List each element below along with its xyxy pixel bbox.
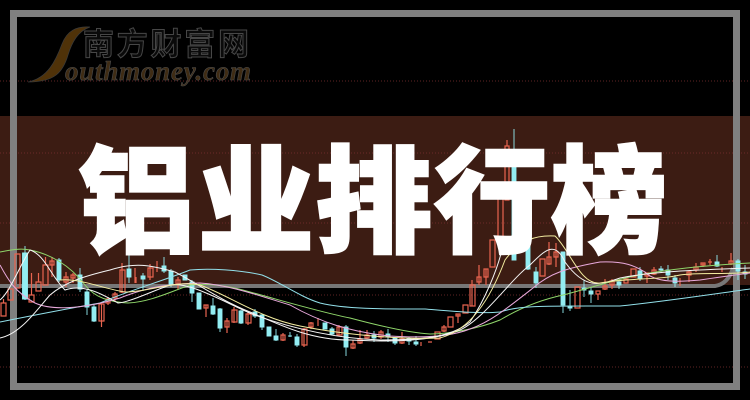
title: 铝业排行榜 [79,138,667,268]
cyan average [0,269,750,322]
watermark logo [28,27,251,86]
icon: logo swoosh [28,27,90,82]
candlestick chart [1,129,747,356]
green average [0,249,750,334]
title band [0,116,750,286]
falling candles [22,129,747,356]
logo domain: outhmoney.com [65,56,251,86]
white average 1 [0,249,750,341]
logo chinese name: 南方财富网 [83,27,249,62]
moving average lines [0,236,750,341]
yellow average [60,236,750,338]
rising candles [1,140,733,349]
white average 2 [0,250,502,340]
pink average [0,262,750,337]
